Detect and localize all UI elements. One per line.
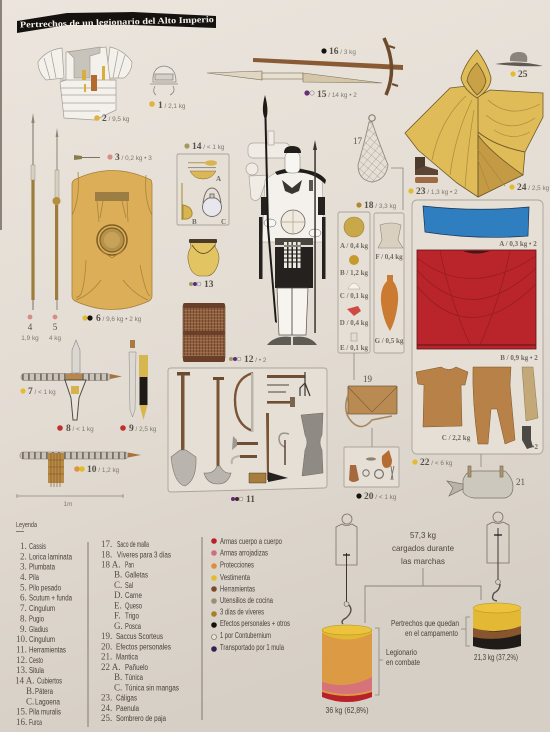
panel: food A-E: D / 0,4 kg (340, 319, 369, 327)
total load connector (365, 568, 481, 623)
legend column 1: Cubiertos (37, 676, 62, 686)
22C sleeveless tunic (416, 367, 468, 427)
legend column 2: Paenula (116, 704, 140, 713)
legend column 1: Pila (29, 573, 39, 582)
label 23: 23 / 1,3 kg • 2 (416, 187, 458, 197)
right scale (487, 512, 509, 601)
legend column 1: 12. (16, 655, 27, 665)
legionary figure (246, 95, 326, 345)
legend column 1: 1. (20, 541, 27, 551)
legend column 1: Furca (29, 718, 42, 727)
legend heading (16, 522, 37, 532)
legend column 2: Saco de malla (117, 540, 149, 549)
legend column 1 (15, 541, 73, 727)
total load text: 57,3 kg (410, 530, 436, 540)
colour legend: Protecciones (220, 560, 254, 570)
legend heading: Leyenda (16, 522, 37, 529)
legend column 1: 9. (20, 624, 27, 634)
sickle (279, 433, 289, 465)
panel: item 14 cookware (177, 154, 229, 226)
legend column 2: F. (114, 611, 121, 621)
legend column 2: 18 A. (101, 560, 121, 570)
arms (259, 217, 262, 279)
label 11 (231, 495, 255, 505)
food A bread (344, 217, 364, 237)
legend column 1: Situla (29, 666, 45, 675)
panel: item 11 tools (168, 368, 327, 492)
legend column 2: Trigo (125, 612, 140, 621)
item 2: lorica segmentata (38, 47, 132, 120)
item 7: cingulum (21, 374, 122, 381)
item 12: cesto (183, 303, 225, 362)
scale bar 1m (17, 494, 123, 508)
label 5: 5 (53, 322, 58, 332)
legend column 1: Herramientas (29, 646, 66, 654)
label 8: 8 / < 1 kg (66, 424, 94, 434)
colour legend: Transportado por 1 mula (220, 643, 284, 652)
label 14: 14 / < 1 kg (192, 142, 225, 152)
left scale (336, 514, 357, 624)
legend column 1: 5. (20, 582, 27, 592)
panel: food A-E (338, 212, 370, 353)
label: camp equipment: Pertrechos que quedan (391, 619, 459, 628)
legend column 1: 3. (20, 562, 27, 572)
connector box to 19 (353, 353, 355, 380)
legend column 2: Efectos personales (116, 642, 171, 651)
panel: item 22 clothing: A / 0,3 kg • 2 (499, 240, 537, 248)
legend column 2: Túnica sin mangas (125, 683, 179, 692)
hammer (232, 436, 258, 450)
legend column 1: 14 A. (15, 676, 35, 686)
title: Pertrechos de un legionario del Alto Imperio (20, 14, 215, 29)
connector 19 to 20 (371, 428, 373, 447)
bracket: camp equipment (461, 617, 470, 646)
right weight: equipment left at camp (473, 603, 521, 650)
panel: food A-E: E / 0,1 kg (340, 344, 368, 352)
food F wheat sack (378, 223, 403, 248)
connector 22 to 21 (480, 454, 482, 467)
legend column 2: 20. (101, 641, 112, 651)
label 5: 4 kg (49, 335, 61, 342)
legend column 2: Queso (125, 601, 142, 610)
item 13: situla (188, 239, 219, 276)
label 4: 1,9 kg (21, 335, 39, 342)
item 3: plumbata (74, 155, 100, 160)
right weight label: 21,3 kg (37,2%) (474, 653, 518, 662)
total load text (392, 530, 454, 566)
legend column 2: Cáligas (116, 694, 137, 703)
feet (267, 337, 317, 345)
legs (277, 288, 308, 335)
colour legend: Herramientas (220, 584, 255, 594)
legend column 2: Túnica (125, 673, 144, 682)
bracket: legionario en combate (375, 628, 383, 695)
total load text: cargados durante (392, 543, 454, 553)
legend column 2: E. (114, 600, 122, 610)
legend column 2: Sombrero de paja (116, 714, 167, 723)
22A neckerchief (423, 206, 529, 237)
legend column 1: 4. (20, 572, 27, 582)
legend column 2: Pan (125, 560, 134, 570)
left weight label: 36 kg (62,8%) (326, 706, 369, 715)
legend column 2: 23. (101, 693, 112, 703)
adze and small tools (267, 372, 310, 407)
legend column 2: Saccus Scorteus (116, 632, 163, 641)
panel: item 22 clothing (412, 200, 543, 454)
legend column 1: 16. (16, 717, 27, 727)
14C lagoena (202, 188, 222, 216)
item 6: scutum with cover (72, 170, 152, 310)
item 23: caligae (415, 157, 438, 183)
colour legend: Armas cuerpo a cuerpo (220, 537, 283, 546)
22C socks (522, 426, 533, 449)
legend column 2: Víveres para 3 días (117, 550, 171, 559)
legend column 2: B. (114, 570, 122, 580)
legend column 2: G. (114, 621, 123, 631)
item 15: pila muralis (207, 71, 382, 83)
panel: item 14 cookware: A (216, 175, 221, 183)
total load text: las marchas (401, 556, 445, 566)
food C salt (348, 283, 360, 289)
food D meat (347, 306, 361, 316)
legend column 1: Scutum + funda (29, 594, 73, 603)
panel: food A-E: B / 1,2 kg (340, 269, 368, 277)
legend column 1: Pila muralis (29, 708, 61, 717)
saw (235, 373, 254, 432)
legend column 2: 24. (101, 703, 112, 713)
legend column 2: Galletas (125, 571, 148, 580)
face (285, 152, 300, 173)
label: legionario en combate (386, 648, 420, 667)
spear (263, 95, 277, 323)
legend column 2: B. (114, 672, 122, 682)
legend column 2: 22 A. (101, 662, 121, 672)
legend column 1: Cassis (29, 542, 46, 551)
connector 17 to 18 (391, 168, 403, 210)
legend column 1: 11. (16, 644, 27, 654)
colour legend: Utensilios de cocina (220, 596, 274, 605)
colour legend (211, 537, 290, 652)
pick (204, 377, 231, 484)
colour legend: Vestimenta (220, 573, 251, 582)
label 16: 16 / 3 kg (329, 47, 356, 57)
item 9: gladius and sheath (129, 340, 148, 420)
legend column 1: Pilo pesado (29, 583, 62, 592)
legend column 2: Posca (125, 622, 141, 631)
legend column 1: 15. (16, 707, 27, 717)
apron tunic (275, 247, 313, 288)
panel: item 22 clothing: C / 2,2 kg (442, 434, 471, 442)
item 17: saco de malla (358, 115, 388, 182)
label 19: 19 (363, 374, 372, 384)
item 24: paenula (405, 50, 543, 197)
label 11: 11 (246, 495, 255, 505)
colour legend: Armas arrojadizas (220, 548, 268, 558)
panel: item 14 cookware: B (192, 218, 197, 226)
legend column 1: Plumbata (29, 563, 56, 572)
label 12 (229, 355, 267, 365)
panel: item 14 cookware: C (221, 218, 226, 226)
legend column 1: 6. (20, 593, 27, 603)
label 5 (49, 315, 61, 342)
legend column 2: Pañuelo (125, 663, 149, 672)
label: camp equipment (391, 619, 459, 638)
label 4 (21, 315, 39, 342)
item 5: pilo pesado (52, 128, 60, 310)
legend column 2: 21. (101, 652, 112, 662)
14A cutlery (188, 160, 217, 179)
food B biscuits (349, 255, 359, 265)
panel: food F-G: F / 0,4 kg (375, 253, 403, 261)
curved tool (232, 455, 257, 464)
legend column 2 (101, 539, 179, 723)
legend column 1: 10. (16, 634, 27, 644)
label 25 (510, 70, 528, 80)
legend column 2: Sal (125, 581, 133, 590)
22B tunic red (417, 250, 536, 349)
item 25: straw hat (495, 52, 543, 66)
label 9: 9 / 2,5 kg (129, 424, 157, 434)
scale bar 1m: 1m (64, 501, 72, 508)
legend column 2: Carne (125, 591, 142, 600)
label: legionario en combate: en combate (386, 658, 420, 667)
label 7: 7 / < 1 kg (28, 387, 56, 397)
item 8: pugio (65, 340, 86, 420)
item 21: mantica (447, 466, 513, 498)
food E cheese (351, 333, 357, 341)
legend column 2: C. (114, 682, 122, 692)
22C trousers (473, 367, 515, 444)
label 22: 22 / < 6 kg (420, 458, 453, 468)
studs (284, 242, 300, 268)
22C roll (522, 367, 538, 421)
label 3: 3 / 0,2 kg • 3 (115, 153, 152, 163)
legend column 1: 2. (20, 551, 27, 561)
legend column 2: 19. (101, 631, 112, 641)
left weight: legionario en combate (322, 625, 372, 702)
label 10: 10 / 1,2 kg (87, 465, 120, 475)
legend column 1: Lagoena (35, 697, 61, 706)
legend column 2: 17. (101, 539, 112, 549)
pilum (313, 140, 317, 333)
label 17: 17 (353, 136, 362, 146)
label 13 (189, 280, 214, 290)
belt (275, 238, 313, 245)
item 19: saccus scorteus (346, 386, 397, 427)
dolabra (249, 413, 288, 483)
legend column 1: Cingulum (29, 604, 55, 613)
colour legend: Efectos personales + otros (220, 619, 290, 628)
panel: item 22 clothing: B / 0,9 kg • 2 (500, 354, 538, 362)
legend column 2: 25. (101, 713, 112, 723)
label 18: 18 / 3,3 kg (364, 201, 397, 211)
legend column 1: Lorica laminata (29, 552, 73, 561)
label 21: 21 (516, 477, 525, 487)
item 10: cingulum with apron (20, 452, 141, 487)
colour legend: 1 por Contubernium (220, 631, 271, 640)
label 2: 2 / 9,5 kg (102, 114, 130, 124)
panel: food F-G: G / 0,5 kg (375, 337, 404, 345)
panel: food A-E: C / 0,1 kg (340, 292, 369, 300)
label 24: 24 / 2,5 kg (517, 183, 550, 193)
label 12: 12 / • 2 (244, 355, 267, 365)
shoulders (275, 168, 326, 184)
legend column 1: Pugio (29, 614, 44, 623)
neck ornaments (282, 180, 302, 194)
label 13: 13 (204, 280, 214, 290)
legend column 1: Cingulum (29, 635, 55, 644)
phalerae shield (281, 210, 305, 234)
item 1: helmet (150, 66, 178, 95)
food G amphora (381, 275, 398, 331)
panel: item 20 personal effects (344, 447, 399, 487)
legend column 2: 18. (101, 549, 112, 559)
panel: item 22 clothing: •2 (532, 443, 538, 451)
panel: food F-G (374, 213, 404, 353)
helmet (284, 146, 301, 153)
legend column 1: 13. (16, 665, 27, 675)
title (17, 12, 216, 33)
label: legionario en combate: Legionario (386, 648, 418, 657)
label 25: 25 (518, 70, 528, 80)
panel: food A-E: A / 0,4 kg (340, 242, 368, 250)
legend column 1: 8. (20, 613, 27, 623)
pack (246, 131, 290, 200)
label: camp equipment: en el campamento (405, 629, 459, 638)
torso (262, 168, 325, 242)
legend column 1: 7. (20, 603, 27, 613)
hands (264, 219, 276, 227)
legend column 1: Gladius (29, 625, 48, 634)
label 15: 15 / 14 kg • 2 (317, 90, 357, 100)
label 6: 6 / 9,6 kg • 2 kg (96, 314, 142, 324)
item 16: furca (253, 38, 403, 95)
label 4: 4 (28, 322, 33, 332)
legend separators (88, 537, 202, 727)
legend column 1: B. (26, 686, 34, 696)
legend column 1: C. (26, 696, 34, 706)
legend column 1: Pátera (35, 687, 54, 696)
item 4: pilum (31, 113, 35, 310)
label 20: 20 / < 1 kg (364, 492, 397, 502)
label 1: 1 / 2,1 kg (158, 101, 186, 111)
legend column 1: Cesto (29, 656, 43, 665)
hourglass bundle (301, 413, 323, 476)
legend column 2: C. (114, 580, 122, 590)
spade (171, 372, 196, 486)
legend column 2: Mantica (116, 653, 139, 662)
14B patera (182, 183, 192, 220)
legend column 2: D. (114, 590, 123, 600)
colour legend: 3 días de víveres (220, 608, 264, 616)
